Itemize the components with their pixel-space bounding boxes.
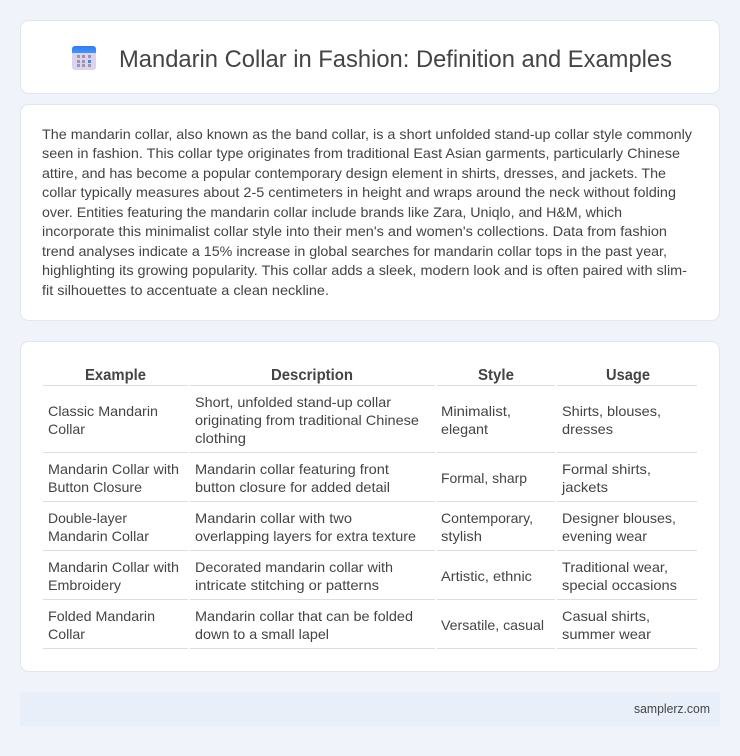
table row: Mandarin Collar with Button Closure: Button Closure [48,479,142,495]
table row: Classic Mandarin Collar: Collar [48,421,85,437]
table row: Double-layer Mandarin Collar: Designer blouses, [562,510,676,526]
text block: definition paragraph: fit silhouettes to accentuate a clean neckline. [42,282,329,298]
table row: Classic Mandarin Collar: clothing [195,430,246,446]
text block: definition paragraph: seen in fashion. This collar type originates from traditional East Asian garments, particularly Chinese [42,145,680,161]
table row: Classic Mandarin Collar: Short, unfolded stand-up collar [195,394,391,410]
table row: Mandarin Collar with Button Closure [48,461,651,495]
table row: Folded Mandarin Collar: Collar [48,626,85,642]
table row: Classic Mandarin Collar: Minimalist, [441,403,511,419]
table row: Mandarin Collar with Button Closure: jackets [561,479,608,495]
table header row [85,367,650,384]
text block: definition paragraph: over. Entities featuring the mandarin collar include brands like Zara, Uniqlo, and H&M, which [42,204,622,220]
table row: Folded Mandarin Collar: Casual shirts, [562,608,650,624]
table header row: Example [85,367,146,384]
table row: Double-layer Mandarin Collar: Contemporary, [441,510,533,526]
table row: Mandarin Collar with Button Closure: button closure for added detail [195,479,390,495]
table row: Double-layer Mandarin Collar: Double-layer [48,510,127,526]
table row: Classic Mandarin Collar: dresses [562,421,613,437]
table row: Folded Mandarin Collar [48,608,651,642]
title: Mandarin Collar in Fashion: Definition and Examples [119,46,672,73]
table row: Mandarin Collar with Button Closure: Mandarin collar featuring front [195,461,389,477]
table row: Mandarin Collar with Embroidery: Decorated mandarin collar with [195,559,393,575]
table row: Mandarin Collar with Embroidery: Mandarin Collar with [48,559,179,575]
table row: Folded Mandarin Collar: summer wear [562,626,651,642]
table row: Classic Mandarin Collar: Shirts, blouses, [562,403,661,419]
table row: Folded Mandarin Collar: Mandarin collar that can be folded [195,608,413,624]
table row: Mandarin Collar with Embroidery: special occasions [562,577,677,593]
table row: Folded Mandarin Collar: down to a small lapel [195,626,329,642]
table row: Mandarin Collar with Embroidery: Traditional wear, [562,559,668,575]
text block: definition paragraph: trend analyses indicate a 15% increase in global searches for mandarin collar tops in the past year, [42,243,667,259]
text block: definition paragraph [42,126,692,298]
table row: Double-layer Mandarin Collar: evening wear [562,528,647,544]
table row: Folded Mandarin Collar: Versatile, casual [441,617,544,633]
table row: Classic Mandarin Collar: Classic Mandarin [48,403,158,419]
text block: definition paragraph: highlighting its growing popularity. This collar adds a sleek, modern look and is often paired with slim- [42,262,687,278]
table row: Double-layer Mandarin Collar: stylish [441,528,482,544]
table header row: Description [271,367,353,384]
footer bar [20,692,720,726]
panel: title header [20,20,720,94]
text block: definition paragraph: attire, and has become a popular contemporary design element in shirts, dresses, and jackets. The [42,165,666,181]
panel: examples table [20,342,720,672]
table row: Mandarin Collar with Button Closure: Formal, sharp [441,470,527,486]
text block: definition paragraph: collar typically measures about 2-5 centimeters in height and wraps around the neck without folding [42,184,676,200]
panel: intro paragraph [20,104,720,320]
table row: Classic Mandarin Collar: elegant [441,421,488,437]
icon: calendar [72,46,96,70]
table row: Double-layer Mandarin Collar: Mandarin Collar [48,528,149,544]
table row: Mandarin Collar with Embroidery: Artistic, ethnic [441,568,532,584]
table row: Double-layer Mandarin Collar [48,510,676,544]
table row: Mandarin Collar with Button Closure: Formal shirts, [562,461,651,477]
table row: Classic Mandarin Collar [48,394,661,446]
text block: definition paragraph: incorporate this minimalist collar style into their men's and women's collections. Data from fashion [42,223,667,239]
table row: Mandarin Collar with Button Closure: Mandarin Collar with [48,461,179,477]
table row: Mandarin Collar with Embroidery: Embroidery [48,577,121,593]
table row: Mandarin Collar with Embroidery: intricate stitching or patterns [195,577,379,593]
table row: Classic Mandarin Collar: originating from traditional Chinese [195,412,419,428]
table header row: Usage [606,367,650,384]
table row: Double-layer Mandarin Collar: Mandarin collar with two [195,510,352,526]
footer source text: samplerz.com [634,702,710,716]
table row: Mandarin Collar with Embroidery [48,559,677,593]
table header row: Style [478,367,514,384]
table row: Double-layer Mandarin Collar: overlapping layers for extra texture [195,528,416,544]
table row: Folded Mandarin Collar: Folded Mandarin [48,608,155,624]
text block: definition paragraph: The mandarin collar, also known as the band collar, is a short unfolded stand-up collar style commonly [42,126,692,142]
